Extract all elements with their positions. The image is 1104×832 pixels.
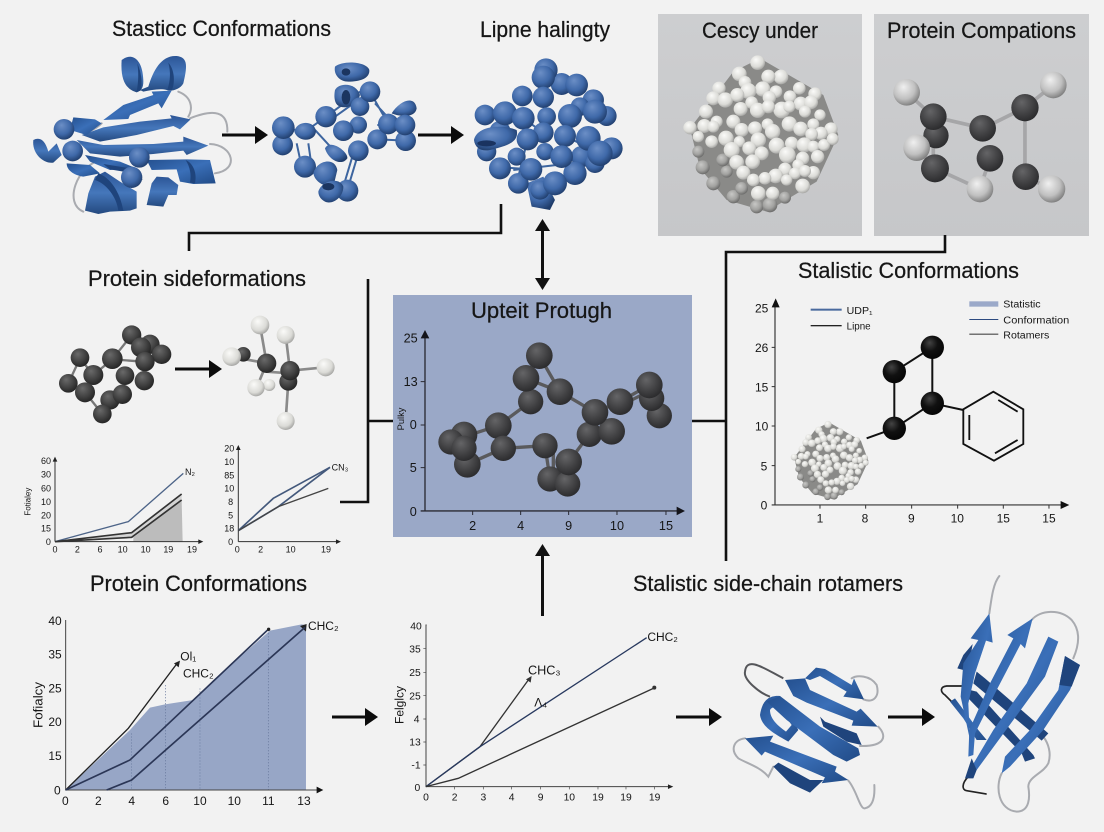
chart: right molecule plot: 8 <box>862 512 869 526</box>
chart: small line chart N2: 19 <box>187 545 197 555</box>
heading: Stalistic Conformations: Stalistic Conformations <box>798 258 1019 283</box>
chart: line chart with CHC labels <box>392 621 678 804</box>
chart: right molecule plot: 26 <box>755 341 769 355</box>
panel: Cescy under <box>658 14 862 236</box>
chart: large area chart: Fofialcy <box>31 682 46 728</box>
arrow: up into central panel <box>535 544 550 616</box>
chart: right molecule plot: 1 <box>817 512 824 526</box>
chart: small line chart CN3: 10 <box>224 457 234 467</box>
chart axes and labels: 5 <box>410 461 417 475</box>
heading: Upteit Protugh: Upteit Protugh <box>471 298 612 323</box>
molecule: white sphere cluster <box>683 55 839 213</box>
chart: right molecule plot: 25 <box>755 302 769 316</box>
arrow: sideformation <box>175 360 222 378</box>
molecule: blue sphere model middle <box>272 63 417 203</box>
chart: line chart with CHC labels: 10 <box>564 793 575 804</box>
heading: Protein Conformations: Protein Conformations <box>90 571 307 596</box>
connector: top-left bracket <box>189 204 501 251</box>
chart: small line chart N2: 0 <box>52 545 57 555</box>
chart: small line chart N2: 10 <box>41 497 51 507</box>
chart: small line chart N2: 2 <box>75 545 80 555</box>
chart: small line chart CN3: 0 <box>228 537 233 547</box>
chart: small line chart N2: Fotialey <box>24 488 33 516</box>
chart axes and labels: 10 <box>610 519 624 533</box>
chart: line chart with CHC labels: 4 <box>414 715 420 726</box>
chart: large area chart: CHC₂ <box>308 619 339 633</box>
chart: large area chart: 10 <box>228 794 241 808</box>
heading: Protein Compations: Protein Compations <box>887 18 1076 43</box>
chart: large area chart: 6 <box>162 794 169 808</box>
heading: Cescy under: Cescy under <box>702 18 818 43</box>
chart: small line chart CN3: CN₃ <box>332 463 349 473</box>
chart: small line chart N2: 60 <box>41 484 51 494</box>
heading: Stalistic side-chain rotamers: Stalistic side-chain rotamers <box>633 571 903 596</box>
arrow: spheres to compact model <box>418 126 464 144</box>
panel: Protein Compations <box>874 14 1089 236</box>
chart: line chart with CHC labels: 19 <box>649 793 661 804</box>
chart: line chart with CHC labels: 25 <box>409 691 421 702</box>
chart: line chart with CHC labels: 9 <box>538 793 544 804</box>
chart: line chart with CHC labels: 40 <box>410 621 422 632</box>
chart: right molecule plot: 15 <box>755 380 769 394</box>
chart: large area chart <box>31 614 339 808</box>
arrow: ribbon to sheet <box>888 708 935 726</box>
chart: small line chart N2: 0 <box>46 537 51 547</box>
chart: right molecule plot: 9 <box>908 512 915 526</box>
chart: large area chart: 13 <box>297 794 311 808</box>
arrow: chart to ribbon <box>676 708 722 726</box>
chart: large area chart: 0 <box>62 794 69 808</box>
chart: right molecule plot: 15 <box>1042 512 1056 526</box>
connector: right bracket <box>692 235 945 561</box>
chart: small line chart N2: 15 <box>41 524 51 534</box>
chart: small line chart N2 <box>24 456 203 555</box>
chart: large area chart: 40 <box>48 614 62 628</box>
legend: left: UDP₁ <box>847 306 873 317</box>
arrow: area chart to line chart <box>332 708 378 726</box>
protein ribbon: top left <box>33 56 231 214</box>
chart axes and labels: 9 <box>565 519 572 533</box>
chart: small line chart CN3: 0 <box>235 545 240 555</box>
chart: large area chart: 15 <box>48 749 62 763</box>
molecule: dark and white sphere model <box>222 316 335 430</box>
chart: line chart with CHC labels: 19 <box>592 793 604 804</box>
chart: line chart with CHC labels: CHC₂ <box>647 630 678 644</box>
chart: small line chart N2: 60 <box>41 456 51 466</box>
legend: right: Conformation <box>1003 315 1069 326</box>
chart axes and labels: Pulky <box>396 407 406 430</box>
legend: left: Lipne <box>847 322 871 333</box>
chart: line chart with CHC labels: 25 <box>409 668 421 679</box>
connector: left chart bracket <box>340 279 393 502</box>
chart: small line chart CN3: 10 <box>286 545 296 555</box>
chart: line chart with CHC labels: 0 <box>423 793 429 804</box>
molecule: black ball-and-stick with hexagon ring <box>867 336 1023 461</box>
chart: small line chart N2: 10 <box>141 545 151 555</box>
heading: Lipne halingty: Lipne halingty <box>480 17 610 42</box>
chart axes and labels: 0 <box>410 418 417 432</box>
heading: Protein sideformations: Protein sideformations <box>88 266 306 291</box>
chart: small line chart N2: 20 <box>41 510 51 520</box>
chart: small line chart CN3: 10 <box>224 484 234 494</box>
panel: Upteit Protugh central chart <box>393 295 692 537</box>
arrow: double-headed to central panel <box>535 219 550 290</box>
chart: large area chart: CHC₂ <box>183 667 214 681</box>
chart: small line chart CN3: 19 <box>321 545 331 555</box>
chart: line chart with CHC labels: 2 <box>452 793 458 804</box>
chart: line chart with CHC labels: 4 <box>509 793 515 804</box>
chart axes and labels: 13 <box>404 375 418 389</box>
legend: right: Statistic <box>1003 299 1041 310</box>
molecule: small white sphere cluster <box>791 421 869 500</box>
chart: right molecule plot: 5 <box>761 459 768 473</box>
chart axes and labels: 25 <box>404 332 418 346</box>
chart: large area chart: 11 <box>262 794 275 808</box>
chart: large area chart: 20 <box>48 715 62 729</box>
chart axes and labels: 2 <box>469 519 476 533</box>
legend: right <box>969 299 1069 342</box>
molecule: dark sphere chain <box>438 342 672 497</box>
chart: large area chart: 0 <box>54 784 61 798</box>
chart: small line chart CN3: 2 <box>258 545 263 555</box>
chart: right molecule plot: 0 <box>761 499 768 513</box>
chart: small line chart CN3 <box>224 444 349 555</box>
legend: left <box>811 306 873 333</box>
chart: large area chart: 35 <box>48 648 62 662</box>
chart: right molecule plot: 10 <box>755 420 769 434</box>
chart axes and labels <box>396 330 685 533</box>
legend: right: Rotamers <box>1003 331 1049 342</box>
chart: small line chart N2: 19 <box>163 545 173 555</box>
chart: small line chart N2: 6 <box>97 545 102 555</box>
chart: small line chart CN3: 85 <box>224 470 234 480</box>
chart: small line chart CN3: 5 <box>228 510 233 520</box>
chart: line chart with CHC labels: Λ₄ <box>534 696 547 710</box>
chart axes and labels: 0 <box>410 505 417 519</box>
protein ribbon: bottom right sheet <box>941 576 1080 812</box>
chart: line chart with CHC labels: Felglcy <box>392 686 406 724</box>
chart: large area chart: 10 <box>193 794 207 808</box>
chart: line chart with CHC labels: 35 <box>409 644 421 655</box>
chart: line chart with CHC labels: -1 <box>411 761 421 772</box>
chart axes and labels: 15 <box>659 519 673 533</box>
chart: right molecule plot <box>755 298 1069 526</box>
chart: line chart with CHC labels: 3 <box>480 793 486 804</box>
molecule: compact blue sphere cluster <box>474 58 623 210</box>
chart: small line chart CN3: 18 <box>224 524 234 534</box>
chart: small line chart CN3: 8 <box>228 497 233 507</box>
chart: large area chart: 25 <box>48 682 62 696</box>
chart: small line chart CN3: 20 <box>224 444 234 454</box>
chart: large area chart: Ol₁ <box>180 650 196 664</box>
protein ribbon: bottom middle <box>734 664 883 808</box>
chart: line chart with CHC labels: 13 <box>409 738 421 749</box>
chart: right molecule plot: 15 <box>997 512 1010 526</box>
chart: large area chart: 2 <box>95 794 102 808</box>
arrow: ribbon to spheres <box>222 126 268 144</box>
molecule: dark sphere model left <box>59 325 171 423</box>
chart axes and labels: 4 <box>517 519 524 533</box>
chart: line chart with CHC labels: CHC₃ <box>528 663 561 677</box>
chart: small line chart N2: 30 <box>41 470 51 480</box>
chart: large area chart: 4 <box>128 794 135 808</box>
chart: line chart with CHC labels: 19 <box>620 793 632 804</box>
chart: small line chart N2: 10 <box>118 545 128 555</box>
molecule: ball and stick <box>893 72 1067 203</box>
heading: Stasticc Conformations: Stasticc Conformations <box>112 16 331 41</box>
chart: small line chart N2: N₂ <box>185 467 195 477</box>
chart: line chart with CHC labels: 0 <box>414 783 420 794</box>
chart: right molecule plot: 10 <box>951 512 964 526</box>
